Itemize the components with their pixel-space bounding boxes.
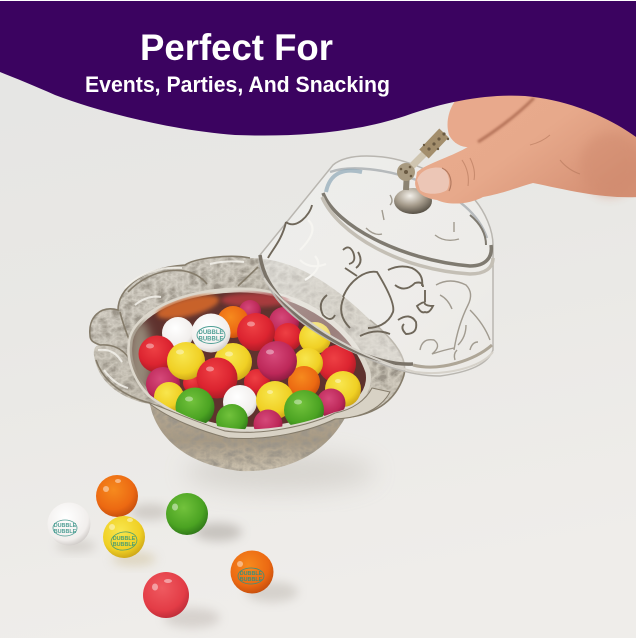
soft shadows on table xyxy=(56,452,375,628)
knuckle creases xyxy=(462,135,580,186)
lid top rim xyxy=(323,193,491,266)
ornamental finial xyxy=(397,132,449,190)
yellow gumball: BUBBLE xyxy=(113,542,136,548)
title: Perfect For xyxy=(140,27,333,68)
white gumball: BUBBLE xyxy=(54,529,77,535)
lid bottom rim xyxy=(260,255,413,364)
gumballs inside the bowl xyxy=(128,291,361,438)
rim white highlights xyxy=(98,261,244,388)
lid top glass edge xyxy=(330,168,487,238)
lid glass body xyxy=(259,156,493,376)
orange logo gumball: BUBBLE xyxy=(240,577,263,583)
palm and thumb xyxy=(415,90,638,204)
logo gumball in the bowl: DUBBLE xyxy=(198,330,224,336)
front rim band xyxy=(150,388,390,439)
finger crease shadow xyxy=(478,98,534,142)
orange logo gumball: DUBBLE xyxy=(240,571,263,577)
lid knob ball xyxy=(394,188,432,214)
green gumball xyxy=(166,493,208,535)
white gumball xyxy=(48,502,90,546)
index finger behind the finial xyxy=(448,90,550,147)
bowl body xyxy=(150,404,346,471)
glass lid xyxy=(259,132,493,376)
loose gumballs xyxy=(48,475,274,618)
yellow gumball: DUBBLE xyxy=(113,536,136,542)
orange logo gumball xyxy=(230,550,274,594)
logo gumball in the bowl xyxy=(192,314,230,352)
thumb nail xyxy=(417,168,449,194)
logo gumball in the bowl: BUBBLE xyxy=(198,336,224,342)
bowl interior xyxy=(130,290,368,429)
purple wave banner xyxy=(0,1,636,137)
pale filigree xyxy=(300,195,490,360)
palm shading xyxy=(580,133,638,197)
hand xyxy=(415,90,638,204)
rim lobe edges xyxy=(90,256,405,418)
subtitle: Events, Parties, And Snacking xyxy=(85,72,390,97)
yellow gumball xyxy=(103,516,145,558)
gold filigree xyxy=(268,205,433,336)
scalloped rim xyxy=(90,256,405,438)
silver bowl xyxy=(90,256,405,471)
red gumball xyxy=(143,572,189,618)
orange gumball xyxy=(96,475,138,517)
white gumball: DUBBLE xyxy=(54,523,77,529)
